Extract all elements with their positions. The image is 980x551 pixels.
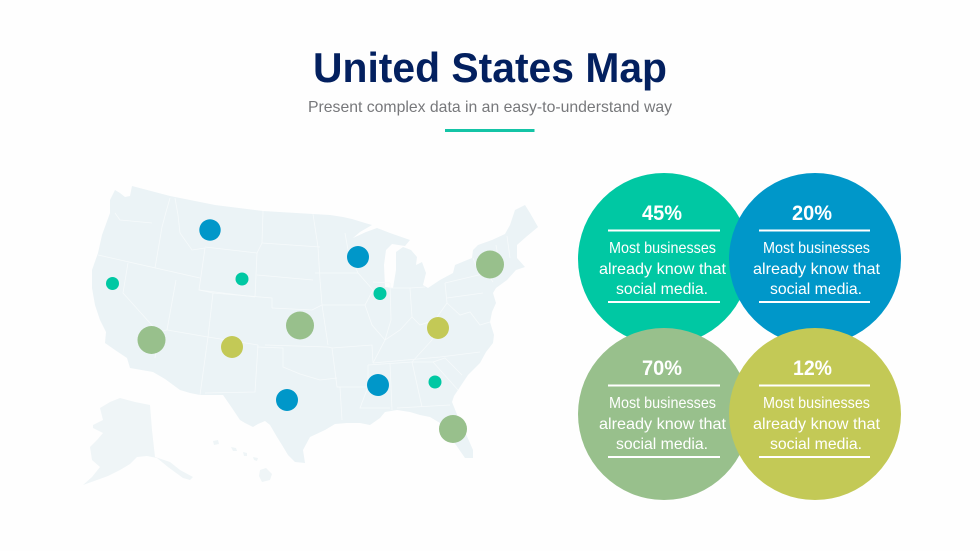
- stat: 20%: social media.: [770, 281, 862, 298]
- stat: 20%: Most businesses: [763, 240, 870, 257]
- stat: 45%: Most businesses: [609, 240, 716, 257]
- map: United States: [83, 186, 538, 485]
- stat: 12%: 12%: [793, 357, 832, 380]
- stat: 70%: Most businesses: [609, 395, 716, 412]
- stat: 45%: 45%: [642, 202, 682, 225]
- stat: 20%: [729, 173, 901, 345]
- map: contiguous states: [92, 186, 538, 463]
- title: United States Map: [313, 44, 667, 91]
- stat: 45%: [578, 173, 750, 345]
- stat: 20%: 20%: [792, 202, 832, 225]
- stat: 70%: social media.: [616, 436, 708, 453]
- stat: 45%: already know that: [599, 261, 727, 278]
- stat: 45%: social media.: [616, 281, 708, 298]
- map: Alaska: [83, 398, 193, 485]
- stat: 12%: already know that: [753, 416, 881, 433]
- title underline accent: [445, 129, 534, 132]
- map: state borders: [98, 198, 510, 420]
- stat: 70%: already know that: [599, 416, 727, 433]
- map pins: [106, 219, 504, 443]
- map: Hawaii: [213, 440, 272, 482]
- stat: 12%: social media.: [770, 436, 862, 453]
- subtitle: Present complex data in an easy-to-understand way: [308, 99, 672, 116]
- stat: 12%: Most businesses: [763, 395, 870, 412]
- stat: 70%: 70%: [642, 357, 682, 380]
- stat: 12%: [729, 328, 901, 500]
- stat: 20%: already know that: [753, 261, 881, 278]
- stat: 70%: [578, 328, 750, 500]
